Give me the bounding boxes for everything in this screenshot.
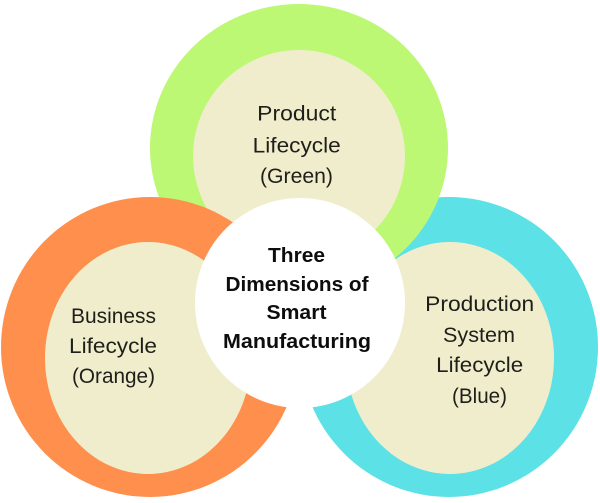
ring: orange business lifecycle bbox=[1, 197, 299, 497]
label: business lifecycle: (Orange) bbox=[72, 365, 155, 388]
label: business lifecycle bbox=[69, 305, 157, 388]
ring: blue production system lifecycle bbox=[300, 197, 598, 497]
disc: orange inner beige bbox=[45, 242, 251, 474]
label: product lifecycle: Product bbox=[257, 102, 336, 126]
heading: center title: Three bbox=[268, 245, 325, 267]
label: product lifecycle: Lifecycle bbox=[253, 134, 341, 158]
heading: center title: Dimensions of bbox=[226, 274, 369, 296]
label: production system lifecycle bbox=[425, 293, 534, 408]
disc: white center bbox=[195, 198, 405, 408]
label: production system lifecycle: Lifecycle bbox=[436, 354, 523, 377]
disc: green inner beige bbox=[193, 50, 405, 262]
disc: blue inner beige bbox=[346, 242, 554, 474]
heading: center title bbox=[223, 245, 371, 353]
label: product lifecycle bbox=[253, 102, 341, 188]
label: product lifecycle: (Green) bbox=[260, 165, 333, 188]
heading: center title: Smart bbox=[266, 302, 327, 324]
label: business lifecycle: Business bbox=[71, 305, 156, 328]
ring: green product lifecycle bbox=[150, 4, 448, 292]
label: production system lifecycle: (Blue) bbox=[452, 385, 507, 408]
label: business lifecycle: Lifecycle bbox=[69, 335, 157, 358]
heading: center title: Manufacturing bbox=[223, 331, 371, 353]
label: production system lifecycle: System bbox=[443, 324, 515, 347]
label: production system lifecycle: Production bbox=[425, 293, 534, 316]
